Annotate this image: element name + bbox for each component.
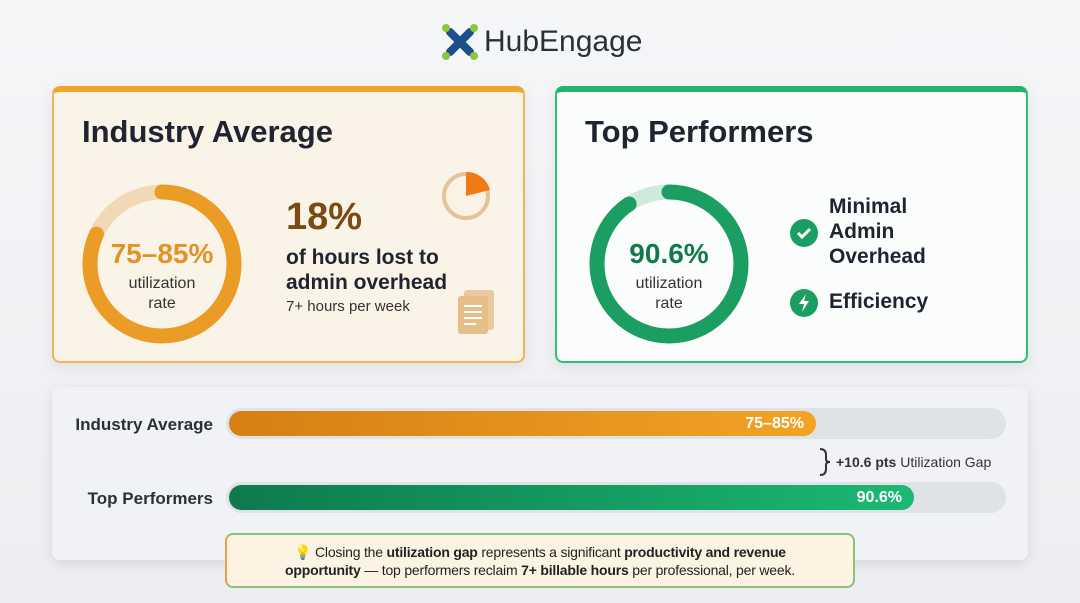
icon: document: [458, 290, 494, 334]
stat: 18%: 7+ hours per week: [286, 298, 410, 315]
panel: comparison bars: [52, 387, 1028, 560]
annotation: gap: [820, 448, 991, 476]
donut: 75-85%: 75–85%: [111, 238, 213, 269]
panel: top performers: [555, 86, 1028, 363]
stat: 18%: 18%: [286, 196, 362, 238]
stat: 18%: admin overhead: [286, 271, 447, 294]
donut: 90.6%: [590, 184, 748, 344]
bar: industry average: 75–85%: [745, 415, 804, 432]
logo: HubEngage: [484, 25, 642, 58]
icon: clock: [442, 172, 490, 220]
bar: top performers: 90.6%: [857, 489, 902, 506]
bar: industry average: [226, 408, 1006, 439]
list: benefits: Efficiency: [829, 290, 928, 313]
donut: 90.6%: 90.6%: [629, 238, 709, 269]
heading: Top Performers: [585, 114, 814, 149]
label: top performers bar: Top Performers: [88, 489, 213, 508]
bar: top performers: [226, 482, 1006, 513]
list: benefits: Minimal: [829, 195, 907, 218]
list: benefits: [790, 195, 928, 317]
callout: [225, 533, 855, 588]
annotation: gap: +10.6 pts Utilization Gap: [836, 454, 991, 470]
panel: industry average: [52, 86, 525, 363]
donut: 90.6%: rate: [655, 295, 683, 312]
list: benefits: Admin: [829, 220, 894, 243]
callout: opportunity — top performers reclaim 7+ billable hours per professional, per week.: [285, 562, 795, 578]
donut: 75-85%: rate: [148, 295, 176, 312]
donut: 90.6%: utilization: [636, 275, 702, 292]
stat: 18%: [286, 196, 447, 315]
callout: 💡 Closing the utilization gap represents a significant productivity and revenue: [294, 544, 786, 560]
label: industry average bar: Industry Average: [75, 415, 213, 434]
donut: 75-85%: utilization: [129, 275, 195, 292]
stat: 18%: of hours lost to: [286, 246, 439, 269]
donut: 75-85%: [82, 184, 242, 344]
list: benefits: Overhead: [829, 245, 926, 268]
heading: Industry Average: [82, 114, 333, 149]
